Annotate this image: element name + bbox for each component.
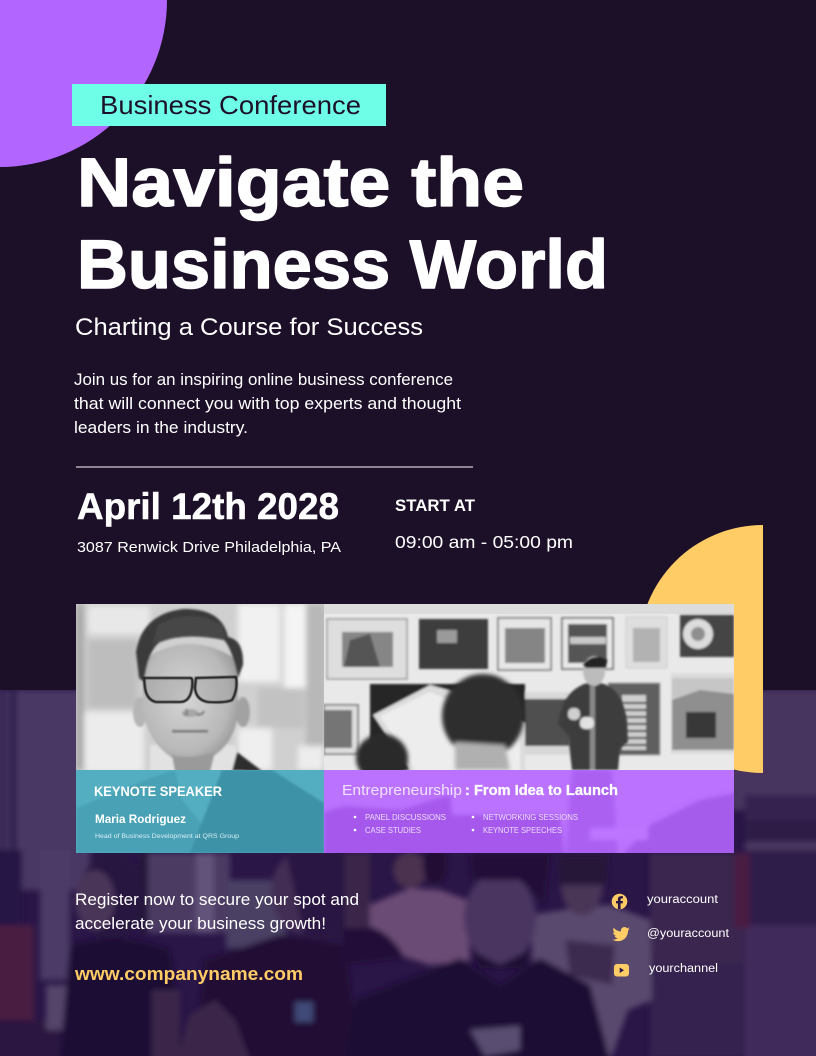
keynote heading: KEYNOTE SPEAKER: [94, 783, 222, 799]
event date: April 12th 2028: [77, 486, 339, 527]
white t-shirt man: [532, 905, 652, 1056]
background photo: audience: [0, 690, 816, 1056]
session list: KEYNOTE SPEECHES: [483, 826, 562, 835]
session list: NETWORKING SESSIONS: [483, 813, 578, 822]
website: www.companyname.com: [74, 964, 303, 984]
icon: twitter: [612, 927, 630, 941]
foreground man: [345, 958, 610, 1056]
title: Navigate the: [77, 144, 524, 221]
registration call to action: [75, 891, 359, 933]
session heading: Entrepreneurship: [342, 783, 462, 799]
speaker name: Maria Rodriguez: [95, 812, 186, 826]
start time: 09:00 am - 05:00 pm: [395, 532, 573, 552]
intro paragraph: [74, 370, 461, 437]
standing presenter: [558, 682, 628, 770]
session heading: : From Idea to Launch: [465, 783, 618, 799]
glasses: [144, 677, 236, 702]
purple quarter circle: [0, 0, 167, 167]
session list: CASE STUDIES: [365, 826, 421, 835]
twitter account: @youraccount: [647, 928, 730, 940]
intro paragraph: leaders in the industry.: [74, 418, 248, 437]
intro paragraph: that will connect you with top experts and thought: [74, 394, 461, 413]
panel: session topics: [324, 770, 740, 860]
foreground heads: [442, 674, 524, 758]
speaker role: Head of Business Development at QRS Group: [95, 833, 239, 840]
icon: youtube: [614, 964, 629, 976]
photo: keynote speaker portrait: [76, 604, 326, 775]
man with beard: [272, 856, 306, 938]
photo: speaker at gallery: [324, 604, 734, 782]
woman on left: [86, 865, 130, 940]
label: business conference: [72, 84, 386, 126]
panel: keynote speaker: [76, 770, 324, 853]
title: [77, 144, 608, 303]
facebook account: youraccount: [647, 894, 719, 906]
icon: facebook: [612, 894, 627, 909]
title: Business World: [77, 226, 608, 303]
session list: [354, 813, 578, 835]
registration call to action: Register now to secure your spot and: [75, 891, 359, 909]
start time label: START AT: [395, 496, 476, 515]
session heading: [342, 783, 618, 799]
wall and pillars behind the audience: [140, 853, 230, 933]
yellow half circle: [639, 525, 763, 773]
youtube channel: yourchannel: [649, 963, 718, 975]
intro paragraph: Join us for an inspiring online business conference: [74, 370, 453, 389]
label: business conference: Business Conference: [100, 90, 361, 120]
registration call to action: accelerate your business growth!: [75, 915, 326, 933]
session list: PANEL DISCUSSIONS: [365, 813, 446, 822]
subtitle: Charting a Course for Success: [75, 314, 423, 341]
address: 3087 Renwick Drive Philadelphia, PA: [77, 539, 341, 556]
woman in peach blouse: [368, 888, 470, 965]
